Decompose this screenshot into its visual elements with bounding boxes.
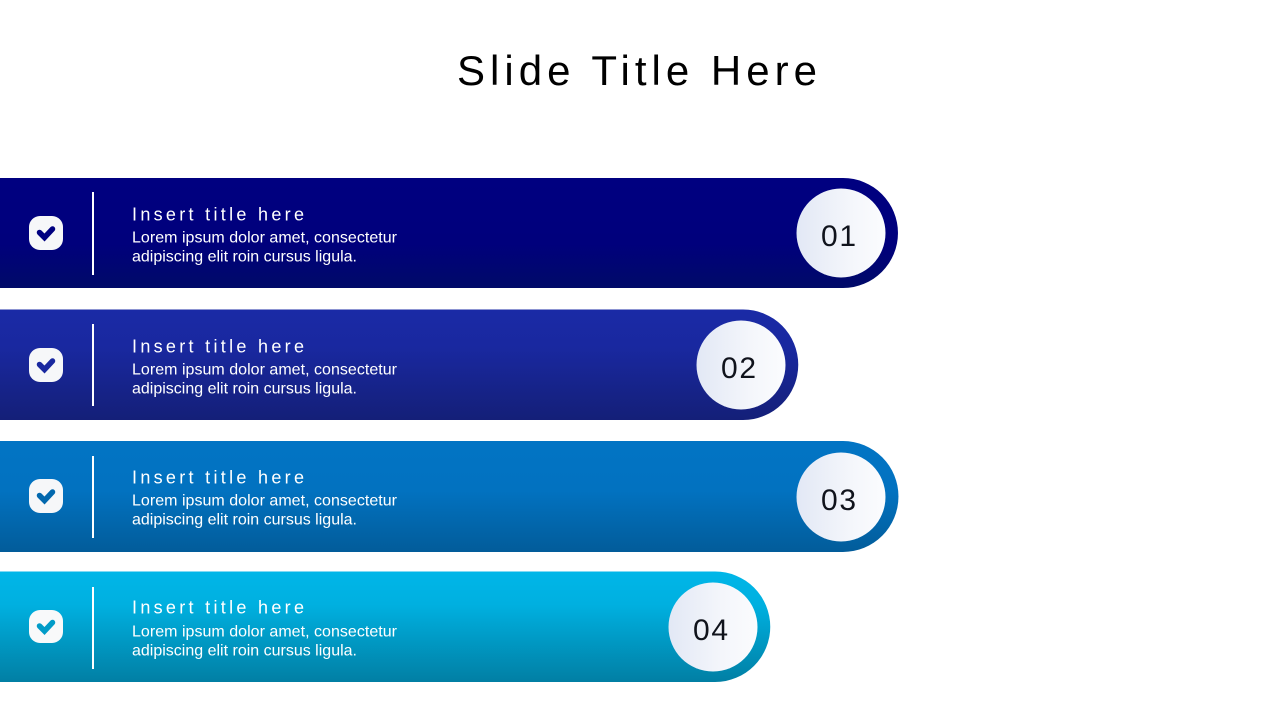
number badge 01: 01 xyxy=(821,220,856,253)
text 01: Lorem ipsum dolor amet, consectetur xyxy=(132,230,398,246)
number badge 03: 03 xyxy=(821,484,856,517)
text 04 xyxy=(132,598,398,660)
icon: check 04 xyxy=(29,610,63,643)
number badge 04 xyxy=(668,582,758,672)
text 01: adipiscing elit roin cursus ligula. xyxy=(132,248,357,266)
icon: check 03 xyxy=(29,479,63,513)
icon: check 01 xyxy=(29,216,63,250)
panel: item 01 xyxy=(0,178,898,288)
text 03 xyxy=(132,468,398,528)
number badge 04: 04 xyxy=(693,614,728,647)
text 04: Lorem ipsum dolor amet, consectetur xyxy=(132,624,398,640)
text 02: adipiscing elit roin cursus ligula. xyxy=(132,380,357,398)
text 03: adipiscing elit roin cursus ligula. xyxy=(132,512,357,528)
bar 03 xyxy=(0,441,898,552)
text 02 xyxy=(132,336,398,398)
text 03: Insert title here xyxy=(132,468,304,488)
number badge 02 xyxy=(696,320,786,410)
text 04: Insert title here xyxy=(132,598,304,618)
text 01: Insert title here xyxy=(132,204,304,224)
title: Slide Title Here xyxy=(457,47,817,94)
text 03: Lorem ipsum dolor amet, consectetur xyxy=(132,492,398,510)
bar 02 xyxy=(0,310,798,420)
text 01 xyxy=(132,204,398,266)
number badge 01 xyxy=(796,188,886,278)
text 04: adipiscing elit roin cursus ligula. xyxy=(132,642,357,660)
bar 01 xyxy=(0,178,898,288)
panel: item 04 xyxy=(0,572,770,682)
bar 04 xyxy=(0,572,770,682)
icon: check 02 xyxy=(29,348,63,382)
number badge 03 xyxy=(796,452,886,542)
panel: item 03 xyxy=(0,441,898,552)
text 02: Lorem ipsum dolor amet, consectetur xyxy=(132,362,398,378)
number badge 02: 02 xyxy=(721,352,756,385)
text 02: Insert title here xyxy=(132,336,304,356)
panel: item 02 xyxy=(0,310,798,420)
